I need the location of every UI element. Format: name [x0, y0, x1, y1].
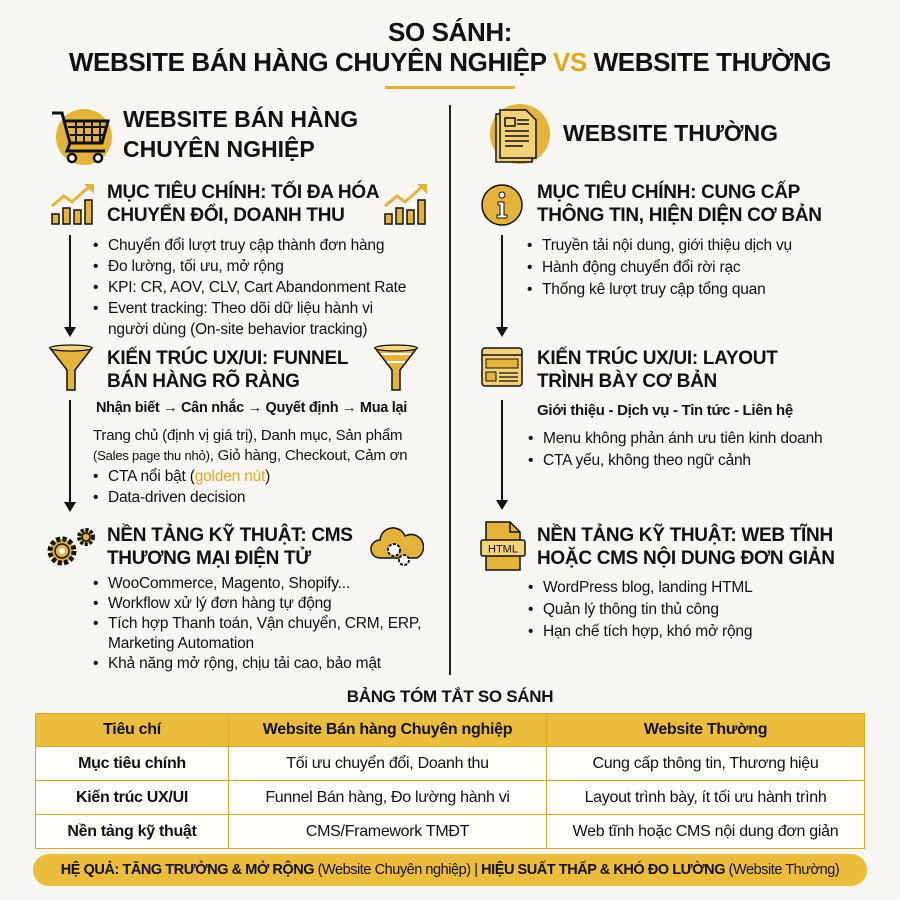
summary table	[35, 713, 865, 849]
heading: muc tieu: CHUYỂN ĐỔI, DOANH THU	[107, 205, 345, 226]
bullets: nen tang right	[528, 579, 752, 640]
icon: cloud gears	[370, 527, 424, 566]
icon: growth chart	[51, 184, 94, 225]
bullets: muc tieu right	[528, 237, 792, 298]
pages text: (Sales page thu nhỏ), Giỏ hàng, Checkout, Cảm ơn	[93, 447, 407, 464]
heading: muc tieu right: THÔNG TIN, HIỆN DIỆN CƠ BẢN	[537, 205, 822, 226]
icon: funnel	[48, 344, 94, 391]
summary table: Website Bán hàng Chuyên nghiệp	[263, 721, 512, 738]
heading: nen tang: THƯƠNG MẠI ĐIỆN TỬ	[107, 548, 311, 569]
bullets: UX/UI	[94, 468, 270, 506]
heading: UX/UI: BÁN HÀNG RÕ RÀNG	[107, 371, 300, 392]
heading: UX/UI right: TRÌNH BÀY CƠ BẢN	[537, 371, 717, 392]
bullets: muc tieu: Event tracking: Theo dõi dữ liệu hành vi	[108, 300, 373, 317]
heading: UX/UI right: KIẾN TRÚC UX/UI: LAYOUT	[537, 348, 777, 369]
heading: muc tieu	[107, 180, 379, 226]
bullets: muc tieu: Đo lường, tối ưu, mở rộng	[108, 258, 284, 275]
menu text: Giới thiệu - Dịch vụ - Tin tức - Liên hệ	[537, 402, 793, 419]
summary table: CMS/Framework TMĐT	[306, 822, 469, 840]
heading: muc tieu right: MỤC TIÊU CHÍNH: CUNG CẤP	[537, 182, 800, 203]
summary table: Cung cấp thông tin, Thương hiệu	[592, 754, 818, 772]
heading: nen tang right: HOẶC CMS NỘI DUNG ĐƠN GIẢN	[537, 548, 835, 569]
consequence banner	[33, 854, 867, 886]
bullets: nen tang: Tích hợp Thanh toán, Vận chuyển, CRM, ERP,	[108, 615, 421, 632]
bullets: nen tang right: Quản lý thông tin thủ công	[543, 601, 719, 618]
arrow	[501, 235, 503, 335]
heading: nen tang right: NỀN TẢNG KỸ THUẬT: WEB TĨNH	[537, 525, 833, 546]
pages text: Trang chủ (định vị giá trị), Danh mục, Sản phẩm	[93, 427, 402, 444]
center divider	[449, 105, 451, 675]
heading: nen tang: NỀN TẢNG KỸ THUẬT: CMS	[107, 525, 353, 546]
bullets: muc tieu: Chuyển đổi lượt truy cập thành đơn hàng	[108, 237, 384, 254]
bullets: nen tang: Workflow xử lý đơn hàng tự động	[108, 595, 331, 612]
bullets: nen tang right: Hạn chế tích hợp, khó mở rộng	[543, 623, 752, 640]
icon: funnel right	[374, 344, 418, 391]
heading: nen tang right	[537, 524, 835, 569]
heading: muc tieu: MỤC TIÊU CHÍNH: TỐI ĐA HÓA	[107, 182, 379, 203]
heading: right: WEBSITE THƯỜNG	[563, 120, 778, 146]
summary table: Tối ưu chuyển đổi, Doanh thu	[286, 754, 489, 772]
panel: right	[480, 104, 835, 640]
bullets: nen tang: Marketing Automation	[108, 635, 254, 652]
bullets: nen tang: Khả năng mở rộng, chịu tải cao, bảo mật	[108, 655, 381, 672]
heading: UX/UI	[107, 346, 348, 392]
icon: html file: HTML	[488, 544, 518, 556]
bullets: UX/UI: Data-driven decision	[108, 489, 245, 506]
heading: muc tieu right	[537, 180, 822, 226]
bullets: UX/UI right: Menu không phản ánh ưu tiên kinh doanh	[543, 430, 822, 447]
title	[68, 17, 831, 77]
heading: nen tang	[107, 524, 353, 569]
pages text	[93, 427, 407, 464]
summary table: Mục tiêu chính	[78, 754, 186, 772]
heading: left: CHUYÊN NGHIỆP	[123, 136, 315, 162]
heading: UX/UI right	[537, 346, 778, 392]
title underline	[385, 86, 515, 89]
arrow	[501, 400, 503, 508]
icon: document	[490, 104, 550, 164]
bullets: UX/UI right: CTA yếu, không theo ngữ cảnh	[543, 452, 751, 469]
icon: cart	[52, 109, 112, 165]
bullets: UX/UI right	[528, 430, 822, 469]
heading: UX/UI: KIẾN TRÚC UX/UI: FUNNEL	[107, 348, 348, 369]
icon: growth chart right	[384, 184, 427, 225]
summary table: Tiêu chí	[103, 721, 161, 738]
icon: layout	[481, 347, 523, 387]
bullets: muc tieu	[94, 237, 406, 338]
icon: info	[481, 184, 523, 226]
panel: left	[48, 106, 427, 672]
summary table: Nền tảng kỹ thuật	[67, 822, 197, 840]
title: SO SÁNH:	[388, 17, 512, 47]
bullets: muc tieu right: Thống kê lượt truy cập tổng quan	[542, 281, 766, 298]
bullets: muc tieu right: Truyền tải nội dung, giới thiệu dịch vụ	[542, 237, 792, 254]
arrow	[69, 235, 71, 335]
bullets: UX/UI: CTA nổi bật (golden nút)	[108, 468, 270, 485]
bullets: nen tang: WooCommerce, Magento, Shopify...	[108, 575, 350, 592]
funnel flow: Nhận biết → Cân nhắc → Quyết định → Mua lại	[96, 400, 407, 416]
summary table: Web tĩnh hoặc CMS nội dung đơn giản	[573, 822, 838, 840]
summary table: Kiến trúc UX/UI	[76, 788, 188, 806]
summary table: Funnel Bán hàng, Đo lường hành vi	[265, 788, 510, 806]
title: WEBSITE BÁN HÀNG CHUYÊN NGHIỆP VS WEBSITE THƯỜNG	[69, 47, 831, 77]
bullets: nen tang	[94, 575, 421, 672]
bullets: muc tieu: người dùng (On-site behavior tracking)	[108, 321, 367, 338]
heading: left: WEBSITE BÁN HÀNG	[123, 106, 358, 132]
summary table: Layout trình bày, ít tối ưu hành trình	[585, 788, 826, 806]
icon: gears	[48, 528, 95, 566]
bullets: nen tang right: WordPress blog, landing HTML	[543, 579, 752, 596]
heading: left	[123, 106, 358, 162]
summary table: Website Thường	[644, 721, 767, 738]
consequence banner: HỆ QUẢ: TĂNG TRƯỞNG & MỞ RỘNG (Website Chuyên nghiệp) | HIỆU SUẤT THẤP & KHÓ ĐO LƯỜNG (Website Thường)	[61, 862, 839, 878]
arrow	[69, 400, 71, 510]
bullets: muc tieu: KPI: CR, AOV, CLV, Cart Abandonment Rate	[108, 279, 406, 296]
table title: BẢNG TÓM TẮT SO SÁNH	[347, 687, 553, 706]
bullets: muc tieu right: Hành động chuyển đổi rời rạc	[542, 259, 740, 276]
icon: html file	[480, 521, 526, 571]
